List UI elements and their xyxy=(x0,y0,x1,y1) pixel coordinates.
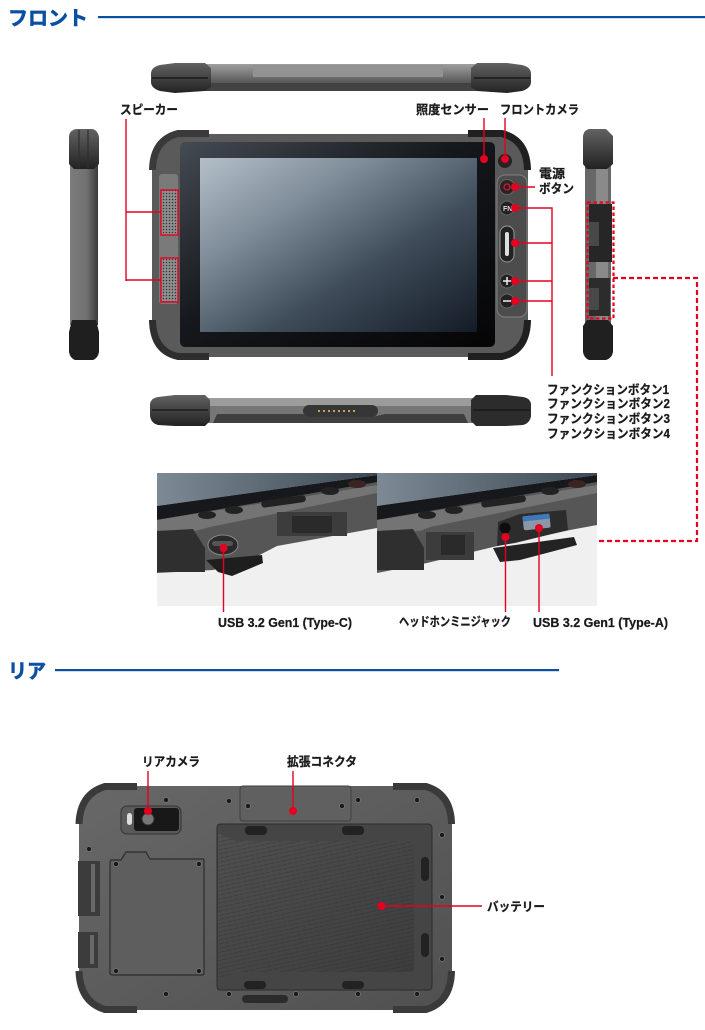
callout: expansion connector: 拡張コネクタ xyxy=(287,754,357,769)
photo: USB Type-A and headphone ports xyxy=(377,473,597,606)
side buttons xyxy=(497,154,527,317)
callout: light sensor: 照度センサー xyxy=(416,102,489,117)
screen bezel xyxy=(180,142,495,347)
side buttons: FN xyxy=(503,206,512,213)
device: left side view xyxy=(69,129,99,360)
bottom slot xyxy=(242,995,288,1003)
callouts: front xyxy=(120,102,697,630)
memory door xyxy=(110,852,204,975)
callout: function buttons: ファンクションボタン1 xyxy=(547,383,669,397)
device: top edge view xyxy=(151,63,531,93)
callout: USB Type-A xyxy=(533,524,668,630)
speaker grille xyxy=(159,174,178,304)
callout: USB Type-A: USB 3.2 Gen1 (Type-A) xyxy=(533,616,668,630)
callout: rear camera xyxy=(142,755,200,815)
rear camera module xyxy=(121,806,181,834)
callout: dashed port connector xyxy=(588,202,697,541)
device: bottom edge view xyxy=(150,395,531,426)
callout: speaker xyxy=(120,103,178,302)
callout: power button xyxy=(511,166,574,196)
photo: USB Type-C port xyxy=(157,473,377,606)
callout: function buttons xyxy=(511,204,670,441)
battery xyxy=(217,824,432,990)
callout: USB Type-C xyxy=(218,544,352,630)
device: front tablet xyxy=(152,134,528,357)
rear body xyxy=(79,786,452,1010)
screen display xyxy=(200,158,477,332)
callout: light sensor xyxy=(416,102,489,163)
callout: battery xyxy=(378,900,545,914)
callout: function buttons: ファンクションボタン4 xyxy=(547,427,670,441)
screws xyxy=(86,798,444,996)
callout: front camera xyxy=(500,103,579,163)
callout: speaker: スピーカー xyxy=(120,103,178,117)
callout: function buttons: ファンクションボタン2 xyxy=(547,397,670,411)
callout: rear camera: リアカメラ xyxy=(142,755,200,769)
device: right side view xyxy=(583,129,613,360)
callout: front camera: フロントカメラ xyxy=(500,103,579,117)
callout: function buttons: ファンクションボタン3 xyxy=(547,412,670,426)
pogo connector xyxy=(303,405,378,417)
callout: USB Type-C: USB 3.2 Gen1 (Type-C) xyxy=(218,616,352,630)
callout: battery: バッテリー xyxy=(487,900,545,914)
callout: headphone jack xyxy=(399,533,511,629)
heading: リア: リア xyxy=(8,661,46,683)
bumpers xyxy=(79,786,452,1010)
callout: power button: 電源 xyxy=(539,166,566,181)
expansion connector cover xyxy=(240,786,351,821)
callout: power button: ボタン xyxy=(539,182,574,196)
device: rear tablet xyxy=(78,786,452,1010)
tablet body xyxy=(152,134,528,357)
heading: フロント: フロント xyxy=(8,8,88,30)
callout: headphone jack: ヘッドホンミニジャック xyxy=(399,615,511,629)
callout: expansion connector xyxy=(287,754,357,815)
left port covers xyxy=(78,861,100,968)
